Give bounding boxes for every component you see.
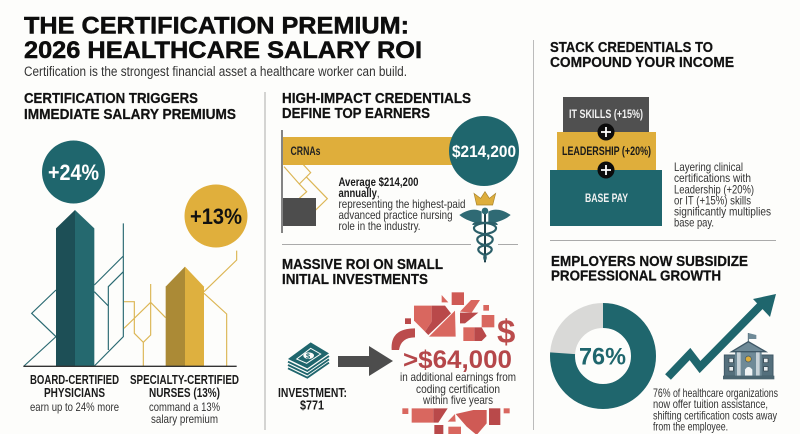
chart: CRNA bar xyxy=(282,130,463,233)
arrow: growth xyxy=(668,294,776,377)
text: earnings description xyxy=(400,370,516,407)
label: physicians: BOARD-CERTIFIED xyxy=(30,373,119,387)
label: investment: $771 xyxy=(300,398,324,412)
diagram: credential stack xyxy=(550,97,662,226)
heading: top earners xyxy=(282,91,471,122)
heading: salary premiums: IMMEDIATE SALARY PREMIUMS xyxy=(24,107,236,123)
chart: CRNA bar: CRNAs xyxy=(290,144,321,158)
text: stack description: or IT (+15%) skills xyxy=(674,194,751,208)
heading: salary premiums: CERTIFICATION TRIGGERS xyxy=(24,91,198,107)
icon: plus xyxy=(598,162,614,178)
label: investment xyxy=(278,386,347,412)
text: employer description: now offer tuition assistance, xyxy=(653,397,768,411)
text: employer description xyxy=(653,386,778,434)
heading: top earners: HIGH-IMPACT CREDENTIALS xyxy=(282,91,471,107)
icon: plus xyxy=(598,124,614,140)
heading: stack credentials xyxy=(550,40,734,71)
label: nurses: NURSES (13%) xyxy=(149,386,220,400)
heading: ROI: MASSIVE ROI ON SMALL xyxy=(282,257,443,273)
icon: cash stack xyxy=(288,342,329,378)
text: CRNA description: annually, xyxy=(338,188,380,200)
chart: 76% donut xyxy=(562,316,644,396)
text: earnings description: coding certification xyxy=(416,382,500,396)
heading: employers xyxy=(551,254,748,284)
heading: stack credentials: STACK CREDENTIALS TO xyxy=(550,40,713,56)
label: physicians: earn up to 24% more xyxy=(30,400,119,414)
heading: employers: EMPLOYERS NOW SUBSIDIZE xyxy=(551,254,748,270)
stat: >$64,000: >$64,000 xyxy=(403,346,512,374)
icon: cash stack: $ xyxy=(306,352,310,361)
icon: dollar sign: $ xyxy=(497,313,515,350)
layer: base pay: BASE PAY xyxy=(585,191,628,205)
text: earnings description: within five years xyxy=(422,393,493,407)
heading: top earners: DEFINE TOP EARNERS xyxy=(282,106,430,122)
text: CRNA description: Average $214,200 xyxy=(338,177,418,189)
label: nurses xyxy=(130,373,239,426)
badge: $214,200 xyxy=(449,116,519,186)
panel: salary premiums xyxy=(23,91,248,426)
panel: employers xyxy=(551,254,778,434)
text: CRNA description xyxy=(338,177,466,233)
badge: $214,200: $214,200 xyxy=(452,142,516,161)
label: physicians xyxy=(30,373,119,414)
graphic: red shards xyxy=(392,292,510,434)
text: stack description: Layering clinical xyxy=(674,160,743,174)
badge: +13%: +13% xyxy=(190,204,242,229)
text: stack description xyxy=(674,160,771,230)
text: stack description: base pay. xyxy=(674,216,714,230)
text: earnings description: in additional earnings from xyxy=(400,370,516,384)
badge: +24% xyxy=(42,140,105,204)
badge: +13% xyxy=(184,184,248,248)
title: THE CERTIFICATION PREMIUM: xyxy=(24,12,409,40)
icon: crown and caduceus xyxy=(459,192,511,262)
title: 2026 HEALTHCARE SALARY ROI xyxy=(24,37,422,64)
chart: 76% donut: 76% xyxy=(579,344,626,370)
badge: +24%: +24% xyxy=(48,160,99,185)
label: physicians: PHYSICIANS xyxy=(44,386,105,400)
heading: ROI: INITIAL INVESTMENTS xyxy=(282,272,428,288)
text: stack description: Leadership (+20%) xyxy=(674,182,754,196)
text: employer description: from the employee. xyxy=(653,420,728,434)
panel: top earners xyxy=(282,91,519,262)
panel: ROI xyxy=(278,257,516,434)
text: CRNA description: role in the industry. xyxy=(338,219,420,233)
text: CRNA description: representing the highest-paid xyxy=(338,197,466,211)
subtitle: Certification is the strongest financial asset a healthcare worker can build. xyxy=(24,64,407,79)
layer: leadership: LEADERSHIP (+20%) xyxy=(562,144,651,158)
chart: premium columns xyxy=(23,210,237,367)
label: nurses: salary premium xyxy=(151,412,218,426)
heading: stack credentials: COMPOUND YOUR INCOME xyxy=(550,55,734,71)
title xyxy=(24,12,422,64)
text: stack description: certifications with xyxy=(674,171,751,185)
layer: IT skills: IT SKILLS (+15%) xyxy=(569,107,643,121)
arrow: investment to return xyxy=(338,346,393,376)
label: investment: INVESTMENT: xyxy=(278,386,347,400)
label: nurses: SPECIALTY-CERTIFIED xyxy=(130,373,239,387)
icon: institution building xyxy=(723,333,774,379)
panel: stack credentials xyxy=(550,40,771,230)
heading: salary premiums xyxy=(24,91,236,123)
text: stack description: significantly multiplies xyxy=(674,204,771,218)
heading: ROI xyxy=(282,257,443,288)
text: CRNA description: advanced practice nursing xyxy=(338,208,452,222)
label: nurses: command a 13% xyxy=(149,400,220,414)
heading: employers: PROFESSIONAL GROWTH xyxy=(551,268,721,284)
